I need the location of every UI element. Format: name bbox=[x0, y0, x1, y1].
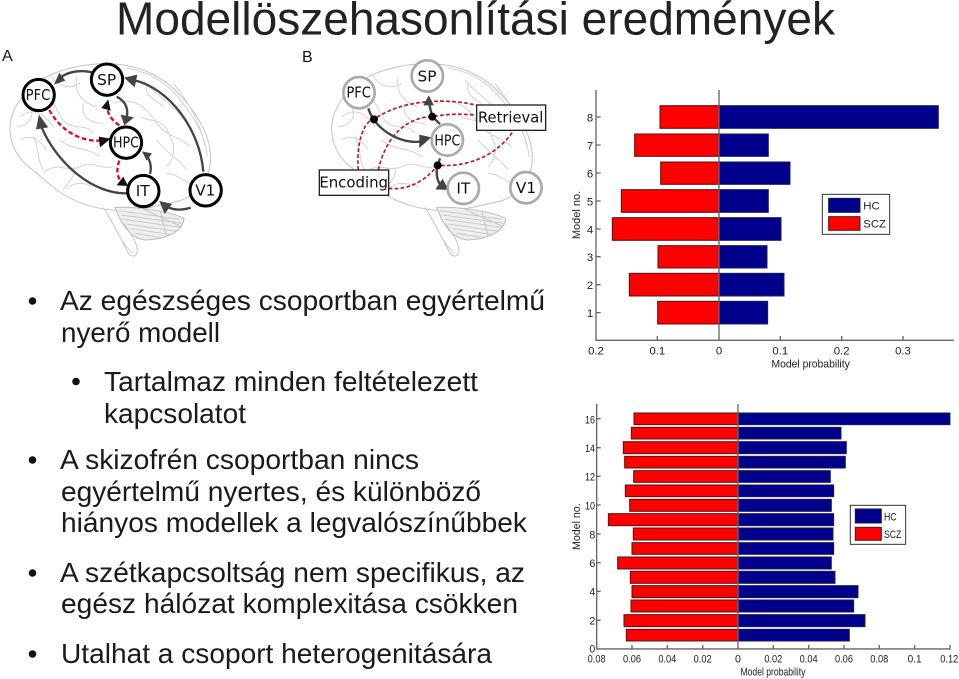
bullet 2 bbox=[29, 444, 528, 538]
node PFC: PFC bbox=[26, 86, 50, 104]
bullet 2: hiányos modellek a legvalószínűbbek bbox=[61, 507, 528, 538]
node IT: IT bbox=[456, 180, 471, 198]
x tick labels: 0.3 bbox=[895, 346, 911, 358]
node SP: SP bbox=[417, 67, 436, 85]
arrow: HPC to SP bbox=[423, 95, 440, 124]
x tick labels: 0.08 bbox=[588, 654, 606, 666]
brain outline bbox=[332, 64, 532, 256]
panel: brain diagram A bbox=[2, 48, 221, 256]
node V1: V1 bbox=[195, 181, 215, 199]
bullet 4: Utalhat a csoport heterogenitására bbox=[61, 638, 492, 669]
bullet 3: A szétkapcsoltság nem specifikus, az bbox=[60, 557, 525, 588]
y tick labels: 0 bbox=[589, 644, 595, 656]
node V1 bbox=[190, 175, 221, 206]
y tick labels: 12 bbox=[585, 472, 595, 484]
sub-bullet: kapcsolatot bbox=[104, 398, 246, 429]
bullet 2: egyértelmű nyertes, és különböző bbox=[61, 476, 481, 507]
node HPC: HPC bbox=[113, 134, 139, 152]
brain diagram A drawing bbox=[10, 64, 221, 256]
bars HC bbox=[719, 106, 938, 324]
arrow: PFC to HPC dashed bbox=[49, 110, 111, 147]
sub-bullet: Tartalmaz minden feltételezett bbox=[104, 366, 478, 397]
node PFC bbox=[343, 77, 375, 108]
bars SCZ bbox=[608, 413, 738, 641]
legend: HC bbox=[863, 200, 880, 212]
node HPC bbox=[432, 124, 463, 156]
x tick labels: 0.2 bbox=[834, 346, 850, 358]
panel: brain diagram B bbox=[302, 49, 546, 256]
legend: SCZ bbox=[884, 529, 901, 541]
node HPC: HPC bbox=[434, 131, 460, 149]
node HPC bbox=[110, 127, 142, 158]
arrow: V1 to IT bbox=[159, 201, 191, 214]
arrow: V1 to SP bbox=[124, 75, 203, 172]
y tick labels: 10 bbox=[585, 500, 595, 512]
x tick labels: 0.1 bbox=[649, 346, 665, 358]
node IT: IT bbox=[136, 182, 150, 200]
axis title y: Model no. bbox=[571, 503, 583, 550]
junction dots bbox=[370, 113, 442, 169]
legend bbox=[822, 194, 890, 234]
axis title x: Model probability bbox=[771, 358, 850, 370]
arrow: HPC to SP dashed bbox=[101, 99, 119, 125]
node IT bbox=[128, 175, 159, 207]
x tick labels: 0.02 bbox=[764, 654, 782, 666]
arrow: HPC to IT dashed bbox=[117, 161, 128, 186]
y tick labels: 1 bbox=[587, 308, 593, 320]
node SP bbox=[412, 60, 443, 92]
bullet 2: A skizofrén csoportban nincs bbox=[60, 444, 419, 475]
y tick labels: 7 bbox=[587, 140, 593, 152]
bars SCZ bbox=[612, 106, 719, 324]
node SP: SP bbox=[97, 71, 116, 89]
legend bbox=[850, 505, 906, 544]
x tick labels: 0.06 bbox=[835, 654, 853, 666]
label A: A bbox=[2, 48, 13, 65]
text block: bullet list bbox=[29, 285, 545, 669]
Encoding box: Encoding bbox=[319, 174, 388, 192]
node PFC bbox=[23, 79, 54, 111]
y tick labels: 6 bbox=[589, 558, 595, 570]
y tick labels: 8 bbox=[589, 529, 595, 541]
y tick labels: 4 bbox=[589, 587, 595, 599]
bullet 1: nyerő modell bbox=[61, 317, 220, 348]
bar chart: 16 models bbox=[571, 404, 958, 678]
axes bbox=[597, 404, 951, 649]
arrow: PFC to HPC bbox=[368, 108, 431, 148]
axis title y: Model no. bbox=[571, 191, 583, 239]
node V1 bbox=[510, 172, 542, 203]
arrow: SP to HPC bbox=[117, 97, 134, 125]
y tick labels: 8 bbox=[587, 112, 593, 124]
y tick labels: 16 bbox=[585, 414, 595, 426]
arrow: IT to PFC bbox=[36, 115, 128, 193]
sub-bullet bbox=[72, 366, 478, 429]
y tick labels: 3 bbox=[587, 252, 593, 264]
Retrieval box: Retrieval bbox=[478, 109, 543, 127]
node IT bbox=[448, 173, 479, 204]
bars HC bbox=[738, 413, 950, 641]
axis title x: Model probability bbox=[740, 666, 806, 678]
legend: HC bbox=[884, 511, 897, 523]
x tick labels bbox=[588, 346, 911, 358]
x tick labels: 0.1 bbox=[908, 654, 922, 666]
arrow: IT to HPC bbox=[142, 151, 152, 174]
bullet 1 bbox=[29, 285, 545, 348]
brain outline bbox=[10, 64, 211, 256]
bar chart: 8 models bbox=[571, 90, 954, 370]
x tick labels bbox=[588, 654, 958, 666]
x tick labels: 0.02 bbox=[694, 654, 712, 666]
legend: SCZ bbox=[863, 219, 886, 231]
bullet 3: egész hálózat komplexitása csökken bbox=[61, 588, 518, 619]
x tick labels: 0.1 bbox=[772, 346, 788, 358]
bullet 3 bbox=[29, 557, 525, 619]
y tick labels: 2 bbox=[587, 280, 593, 292]
x tick labels: 0.2 bbox=[588, 346, 604, 358]
node V1: V1 bbox=[516, 179, 536, 197]
y tick labels: 6 bbox=[587, 168, 593, 180]
label B: B bbox=[302, 49, 313, 66]
x tick labels: 0.04 bbox=[800, 654, 818, 666]
x tick labels: 0.04 bbox=[658, 654, 676, 666]
arrow: HPC to IT bbox=[435, 158, 449, 190]
y tick labels: 4 bbox=[587, 224, 593, 236]
y tick labels bbox=[587, 112, 593, 320]
Retrieval box bbox=[477, 105, 546, 130]
bullet 1: Az egészséges csoportban egyértelmű bbox=[60, 285, 545, 316]
brain diagram B drawing bbox=[319, 60, 546, 256]
node PFC: PFC bbox=[346, 84, 371, 102]
x tick labels: 0.08 bbox=[870, 654, 888, 666]
y tick labels bbox=[585, 414, 595, 656]
x tick labels: 0 bbox=[716, 346, 722, 358]
axes bbox=[596, 90, 954, 340]
y tick labels: 5 bbox=[587, 196, 593, 208]
y tick labels: 14 bbox=[585, 443, 595, 455]
x tick labels: 0 bbox=[735, 654, 741, 666]
node SP bbox=[91, 64, 123, 95]
dashed connections bbox=[358, 101, 514, 189]
arrow: SP to PFC bbox=[54, 71, 92, 85]
y tick labels: 2 bbox=[589, 616, 595, 628]
x tick labels: 0.06 bbox=[623, 654, 641, 666]
